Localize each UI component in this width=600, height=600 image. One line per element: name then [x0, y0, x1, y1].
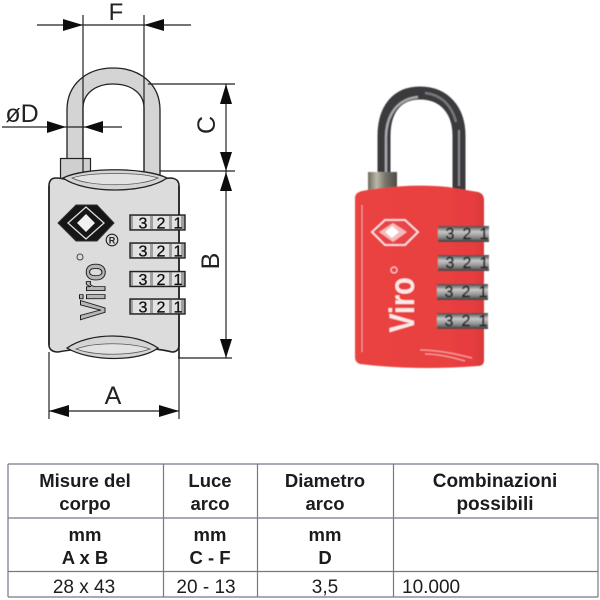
red body	[355, 186, 484, 368]
dimension A: A	[105, 382, 122, 410]
dimension B	[178, 171, 232, 358]
dimension D	[2, 100, 122, 133]
combination wheels: 1	[479, 313, 488, 330]
registered mark	[391, 267, 397, 273]
combination wheels: 3	[446, 255, 455, 272]
combination wheels	[130, 215, 185, 316]
values row: 28 x 43	[53, 577, 115, 598]
combination wheels: 2	[157, 300, 166, 316]
brand name Viro: Viro	[383, 278, 422, 332]
combination wheels: 3	[139, 300, 148, 316]
brand name Viro: Viro	[74, 263, 113, 320]
combination wheels: 2	[157, 216, 166, 232]
shackle	[67, 68, 160, 176]
combination wheels: 2	[157, 272, 166, 289]
column: shackle clearance: arco	[190, 493, 230, 514]
combination wheels: 2	[462, 313, 471, 330]
values row	[53, 577, 460, 598]
metal collar	[368, 172, 397, 191]
registered mark	[106, 234, 118, 246]
column: combinations	[433, 471, 557, 515]
column: body size: A x B	[62, 547, 108, 568]
dimension F	[37, 0, 191, 172]
column: shackle clearance	[188, 470, 232, 568]
icon: hexagon logo	[58, 205, 114, 241]
photo: red padlock	[355, 93, 489, 368]
combination wheels: 1	[174, 300, 183, 316]
column: shackle diameter: mm	[309, 524, 341, 545]
combination wheels: 2	[462, 284, 471, 301]
column: shackle clearance: mm	[194, 524, 226, 545]
small circle mark	[77, 254, 83, 260]
combination wheels: 3	[445, 313, 454, 330]
values row: 10.000	[402, 577, 460, 598]
combination wheels: 3	[139, 272, 148, 289]
dimension A	[49, 352, 179, 419]
combination wheels: 1	[174, 272, 183, 289]
registered mark: R	[109, 236, 116, 246]
column: shackle diameter: Diametro	[285, 470, 365, 491]
combination wheels: 3	[139, 216, 148, 232]
column: shackle diameter: D	[318, 547, 332, 568]
combination wheels: 1	[174, 244, 183, 260]
body highlights	[362, 205, 472, 361]
column: body size	[39, 470, 131, 568]
column: shackle diameter	[285, 470, 365, 568]
values row: 3,5	[312, 577, 338, 598]
column: shackle diameter: arco	[305, 493, 345, 514]
column: body size: mm	[69, 524, 101, 545]
combination wheels: 2	[463, 226, 472, 243]
combination wheels: 1	[479, 284, 488, 301]
combination wheels: 1	[480, 255, 489, 272]
metal shackle	[384, 93, 459, 190]
dimension D: øD	[5, 100, 39, 128]
combination wheels: 3	[445, 284, 454, 301]
values row: 20 - 13	[176, 577, 236, 598]
combination wheels	[437, 226, 489, 330]
dimension C: C	[193, 116, 221, 134]
column: combinations: possibili	[456, 494, 534, 515]
shackle collar	[60, 158, 90, 178]
column: body size: corpo	[59, 493, 111, 514]
combination wheels: 3	[446, 226, 455, 243]
column: shackle clearance: Luce	[188, 470, 232, 491]
combination wheels: 2	[463, 255, 472, 272]
white logo	[372, 220, 418, 245]
combination wheels: 1	[174, 216, 183, 232]
column: shackle clearance: C - F	[189, 547, 231, 568]
technical drawing: grey padlock with dimensions	[2, 0, 235, 419]
padlock body	[49, 170, 179, 358]
table grid	[8, 464, 598, 597]
column: body size: Misure del	[39, 470, 131, 491]
specifications table	[8, 464, 598, 598]
combination wheels: 3	[139, 244, 148, 260]
dimension C	[148, 84, 235, 171]
dimension B: B	[197, 253, 225, 269]
column: combinations: Combinazioni	[433, 471, 557, 492]
combination wheels: 1	[480, 226, 489, 243]
combination wheels: 2	[157, 244, 166, 260]
